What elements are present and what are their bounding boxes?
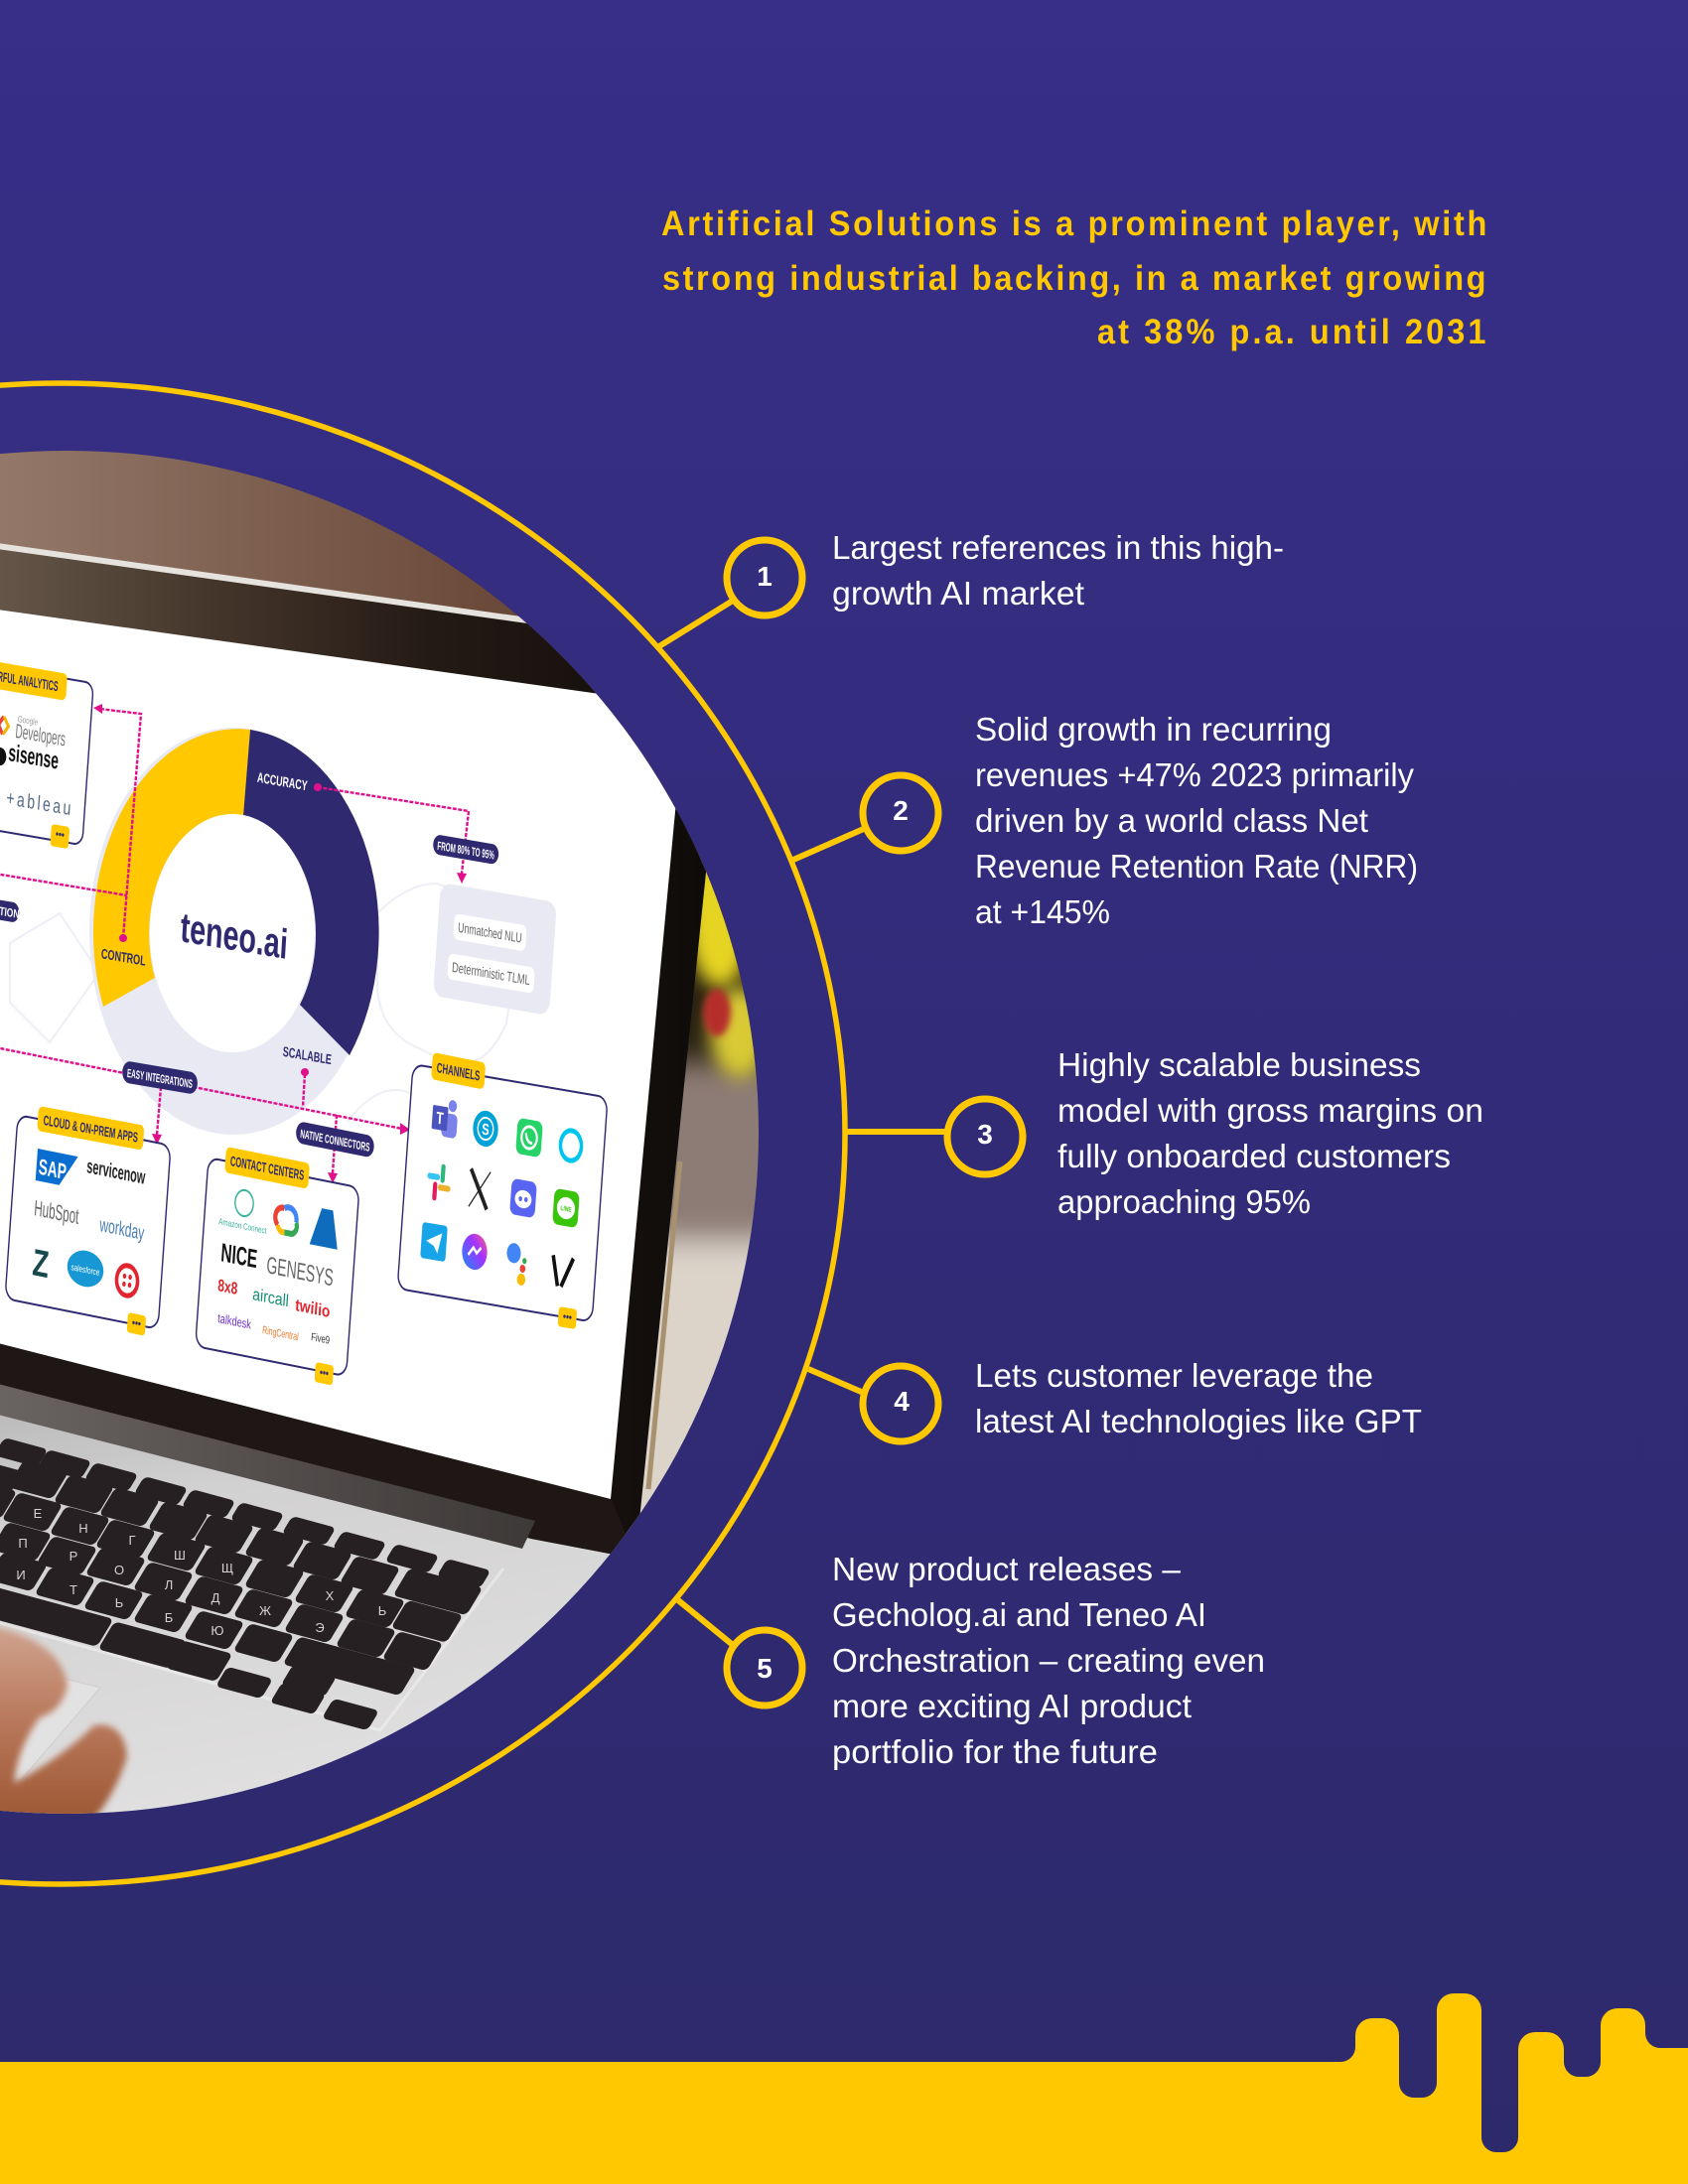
- chip: unmatched NLU: Unmatched NLU: [458, 919, 522, 946]
- photo: keyboard letters: Ж: [259, 1603, 271, 1618]
- photo: trackpad: [0, 1668, 100, 1780]
- channels more tab: •••: [563, 1311, 573, 1325]
- text 3: approaching 95%: [1057, 1183, 1311, 1220]
- photo: keyboard letters: Р: [70, 1549, 77, 1564]
- contact centers more tab: [315, 1362, 334, 1386]
- logo: Google Cloud: [274, 1205, 298, 1235]
- analytics: more tab: [50, 824, 70, 849]
- icon: Slack: [428, 1164, 450, 1200]
- text 2: Solid growth in recurring: [975, 711, 1332, 748]
- photo: keyboard keys: [0, 1437, 491, 1730]
- photo: keyboard letters: Ш: [174, 1548, 186, 1563]
- contact centers tag: CONTACT CENTERS: [229, 1153, 305, 1183]
- logo: salesforce: [67, 1247, 104, 1291]
- outer yellow ring: [0, 383, 845, 1884]
- donut: accuracy label: ACCURACY: [257, 769, 308, 794]
- photo: keyboard letters: Г: [128, 1533, 136, 1548]
- icon: Alexa: [559, 1129, 583, 1162]
- channels more tab: [558, 1306, 577, 1329]
- photo: keyboard letters: Б: [165, 1610, 173, 1625]
- connector 2: [793, 828, 866, 860]
- connector 1: [659, 601, 733, 646]
- photo: wall backdrop: [0, 437, 784, 933]
- photo: keyboard letters: Е: [34, 1506, 43, 1521]
- text 5: Orchestration – creating even: [832, 1642, 1265, 1679]
- logo: SAP: [36, 1149, 78, 1188]
- cloud apps tag: CLOUD & ON-PREM APPS: [43, 1112, 138, 1146]
- text 3: model with gross margins on: [1057, 1092, 1483, 1129]
- screen: dashed connectors: [0, 704, 469, 1183]
- icon: LINE: LINE: [560, 1204, 572, 1214]
- icon: Teams: [431, 1097, 459, 1139]
- title: Artificial Solutions is a prominent player, with: [661, 205, 1486, 243]
- photo: hinge: [0, 1382, 535, 1549]
- badge 1: 1: [757, 561, 773, 592]
- icon: Discord: [509, 1178, 537, 1218]
- title: at 38% p.a. until 2031: [1097, 313, 1486, 351]
- donut: light scalable segment: [89, 728, 348, 1135]
- photo: keyboard letters: Н: [78, 1521, 88, 1536]
- text 3: [1057, 1046, 1483, 1220]
- icon: Skype: S: [482, 1119, 490, 1139]
- badge 5: [727, 1630, 802, 1706]
- item 5: [727, 1551, 1265, 1770]
- donut: yellow control segment: [93, 729, 250, 1007]
- icon: LINE: [552, 1188, 580, 1228]
- photo: keyboard letters: Л: [165, 1577, 173, 1592]
- logo: servicenow: servicenow: [86, 1155, 146, 1188]
- cloud apps more tab: [127, 1312, 146, 1336]
- item 3: [947, 1046, 1483, 1220]
- screen: NLU grey box: [433, 883, 557, 1016]
- connector 5: [678, 1600, 733, 1645]
- logo: twilio: [115, 1264, 139, 1297]
- icon: X: [469, 1168, 491, 1210]
- logo: Amazon Connect: [218, 1185, 270, 1236]
- badge 2: [863, 775, 938, 851]
- donut: control label: CONTROL: [100, 945, 147, 969]
- logo: workday: workday: [98, 1212, 145, 1245]
- photo: white screen: [0, 609, 685, 1499]
- screen: analytics card: [0, 645, 93, 849]
- screen: from 80% to 95% pill: [433, 834, 499, 865]
- text 2: Revenue Retention Rate (NRR): [975, 848, 1418, 885]
- item 4: [863, 1357, 1422, 1441]
- connector 3: [846, 1129, 946, 1135]
- connector 4: [808, 1369, 866, 1394]
- logo: twilio word: twilio: [295, 1297, 331, 1322]
- cloud apps tag: [37, 1106, 144, 1151]
- photo: background flowers and cloth: [586, 774, 759, 1582]
- text 4: latest AI technologies like GPT: [975, 1403, 1422, 1439]
- photo: lid edge highlight: [0, 545, 556, 624]
- screen: contact centers card: [196, 1147, 359, 1386]
- badge 2: 2: [893, 795, 909, 826]
- channels tag: [431, 1052, 486, 1090]
- analytics: tableau: +ableau: [6, 786, 74, 820]
- icon: Messenger: [461, 1232, 489, 1272]
- laptop photo in circle: [0, 437, 794, 1886]
- logo: NICE: NICE: [220, 1238, 258, 1274]
- chip: deterministic TLML: Deterministic TLML: [452, 959, 530, 989]
- contact centers tag: [224, 1147, 310, 1189]
- title: [661, 205, 1486, 351]
- screen: easy integrations pill: [121, 1060, 199, 1095]
- yellow footer band with drip shape: [0, 1993, 1688, 2184]
- analytics: more tab: •••: [56, 829, 66, 843]
- photo: keyboard letters: Д: [211, 1590, 220, 1605]
- screen: truncated orchestration pill: [0, 891, 20, 923]
- text 1: Largest references in this high-: [832, 529, 1284, 566]
- item 2: [863, 711, 1418, 930]
- photo: keyboard letters: И: [16, 1568, 26, 1582]
- logo: RingCentral: RingCentral: [262, 1324, 299, 1344]
- donut: white hole: [150, 814, 315, 1052]
- text 3: Highly scalable business: [1057, 1046, 1421, 1083]
- analytics: google developers: Google: [17, 714, 38, 728]
- photo: laptop lid: [0, 548, 729, 1559]
- text 5: more exciting AI product: [832, 1688, 1192, 1724]
- logo: 8x8: 8x8: [217, 1277, 238, 1299]
- logo: Genesys: GENESYS: [266, 1252, 335, 1292]
- text 1: growth AI market: [832, 575, 1084, 612]
- logo: Azure: [310, 1206, 340, 1250]
- photo: keyboard letters: Ь: [115, 1595, 123, 1610]
- badge 3: [947, 1099, 1023, 1174]
- text 5: Gecholog.ai and Teneo AI: [832, 1596, 1206, 1633]
- logo: aircall: aircall: [252, 1286, 289, 1311]
- icon: WhatsApp: [515, 1118, 543, 1158]
- screen: faint background shapes: [9, 883, 509, 1122]
- photo: lid lower bezel: [0, 1340, 635, 1559]
- item 1: [727, 529, 1284, 615]
- donut: navy accuracy segment: [243, 730, 379, 1055]
- photo: keyboard letters: О: [114, 1563, 124, 1577]
- photo: keyboard letters: Х: [326, 1588, 335, 1603]
- photo: keyboard letters: Щ: [221, 1561, 233, 1575]
- screen: native connectors pill: NATIVE CONNECTORS: [300, 1129, 370, 1155]
- text 3: fully onboarded customers: [1057, 1138, 1451, 1174]
- text 2: driven by a world class Net: [975, 802, 1368, 839]
- icon: V logo: [551, 1255, 573, 1289]
- photo: hand and fingers: [0, 1624, 127, 1822]
- screen: cloud apps card: [5, 1106, 171, 1336]
- logo: Zendesk: Z: [31, 1242, 51, 1287]
- icon: Teams: T: [436, 1110, 444, 1129]
- text 2: [975, 711, 1418, 930]
- text 5: [832, 1551, 1265, 1770]
- analytics: sisense: [0, 745, 58, 768]
- screen: native connectors pill: [295, 1121, 374, 1159]
- icon: Google Assistant: [504, 1242, 528, 1287]
- photo: keyboard well edge: [0, 1569, 503, 1730]
- badge 1: [727, 540, 802, 615]
- logo: Five9: Five9: [311, 1331, 330, 1347]
- photo: keyboard letters: Т: [70, 1582, 77, 1597]
- photo: keyboard letters: П: [18, 1536, 28, 1551]
- analytics: google developers: Developers: [15, 719, 67, 751]
- logo: SAP: SAP: [38, 1156, 68, 1185]
- photo: keyboard letters: Э: [315, 1620, 325, 1635]
- text 5: portfolio for the future: [832, 1733, 1158, 1770]
- logo: Amazon Connect: Amazon Connect: [218, 1216, 268, 1236]
- text 4: [975, 1357, 1422, 1439]
- screen: from 80% to 95% pill: FROM 80% TO 95%: [437, 841, 494, 863]
- screen: donut chart: [89, 728, 379, 1135]
- photo: keyboard letters: Ю: [211, 1623, 224, 1638]
- text 1: [832, 529, 1284, 612]
- text 2: at +145%: [975, 893, 1110, 930]
- donut: scalable label: SCALABLE: [282, 1043, 332, 1068]
- photo: lid side edge: [648, 1161, 680, 1489]
- photo: keyboard deck: [0, 1416, 633, 1814]
- text 5: New product releases –: [832, 1551, 1182, 1587]
- analytics: sisense: sisense: [8, 740, 60, 774]
- screen: easy integrations pill: EASY INTEGRATIONS: [127, 1068, 193, 1092]
- photo: keyboard letters: [16, 1506, 386, 1638]
- badge 4: [863, 1366, 938, 1441]
- icon: Telegram: [420, 1222, 448, 1262]
- contact centers more tab: •••: [320, 1367, 330, 1381]
- analytics: google developers: [0, 715, 66, 748]
- text 2: revenues +47% 2023 primarily: [975, 756, 1414, 793]
- screen: channels card: [397, 1052, 608, 1329]
- cloud apps more tab: •••: [132, 1317, 142, 1331]
- badge 4: 4: [894, 1386, 910, 1417]
- photo: keyboard letters: Ь: [378, 1603, 386, 1618]
- title: strong industrial backing, in a market growing: [662, 259, 1486, 298]
- text 4: Lets customer leverage the: [975, 1357, 1373, 1394]
- logo: salesforce: salesforce: [70, 1262, 100, 1278]
- donut: teneo.ai logo: teneo.ai: [179, 903, 289, 968]
- badge 3: 3: [977, 1119, 993, 1150]
- logo: HubSpot: HubSpot: [34, 1197, 79, 1230]
- badge 5: 5: [757, 1653, 773, 1684]
- channels tag: CHANNELS: [436, 1059, 481, 1084]
- icon: Skype: [472, 1109, 499, 1149]
- logo: talkdesk: talkdesk: [217, 1312, 252, 1332]
